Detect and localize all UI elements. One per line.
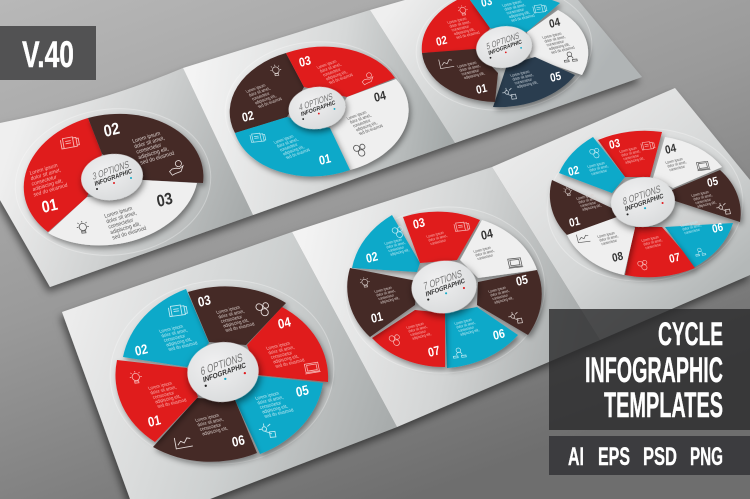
segment 03 red: dolor sit amet, bbox=[318, 62, 342, 74]
segment 06 blue: 06 bbox=[492, 326, 507, 343]
segment 01 brown: consectetur bbox=[460, 67, 481, 76]
segment 02 blue: consectetur bbox=[387, 245, 406, 253]
segment 03 brown: consectetur bbox=[220, 314, 243, 324]
segment 02 red: adipiscing elit, bbox=[452, 26, 476, 36]
segment 06 blue bbox=[665, 220, 733, 268]
segment 05 navy: 05 bbox=[549, 70, 562, 85]
wheel: 6 options bbox=[102, 271, 342, 473]
segment 04 red: adipiscing elit, bbox=[272, 354, 300, 364]
segment 06 blue: Lorem ipsum bbox=[453, 318, 473, 326]
segment 06 brown bbox=[153, 398, 257, 462]
segment 05 brown: 05 bbox=[706, 175, 719, 190]
segment 01 red: sed do eiusmod bbox=[156, 397, 188, 409]
segment 03 red: consectetur bbox=[429, 238, 448, 246]
segment 05 blue: consectetur bbox=[259, 400, 282, 410]
segment 04 white bbox=[527, 10, 588, 75]
segment 05 brown: adipiscing elit, bbox=[696, 200, 717, 209]
segment 05 blue: Lorem ipsum bbox=[254, 391, 280, 401]
wheel: 4 options bbox=[220, 34, 410, 182]
segment 08 white: consectetur bbox=[600, 238, 619, 246]
segment 01 brown: 01 bbox=[475, 82, 488, 97]
segment 02 red: Lorem ipsum bbox=[446, 16, 468, 25]
segment 04 white: dolor sit amet, bbox=[543, 34, 566, 44]
segment 01 red: sed do eiusmod bbox=[33, 182, 68, 199]
segment 02 blue: Lorem ipsum bbox=[586, 161, 606, 169]
center hub: 8 options bbox=[609, 174, 677, 230]
segment 02 brown: 02 bbox=[102, 120, 121, 141]
segment 01 red: 01 bbox=[40, 196, 60, 217]
segment 01 brown: Lorem ipsum bbox=[575, 193, 595, 201]
segment 03 blue: dolor sit amet, bbox=[503, 2, 526, 12]
segment 03 white: dolor sit amet, bbox=[106, 210, 138, 225]
segment 02 brown: sed do eiusmod bbox=[139, 150, 175, 167]
file formats banner: PNG bbox=[690, 443, 723, 471]
center hub: 4 options: INFOGRAPHIC bbox=[301, 100, 336, 118]
segment 05 brown bbox=[477, 270, 542, 335]
center hub: 8 options: 8 OPTIONS bbox=[623, 183, 661, 207]
segment 01 blue: sed do eiusmod bbox=[284, 147, 312, 160]
segment 05 brown: dolor sit amet, bbox=[692, 193, 713, 202]
version badge bbox=[0, 26, 96, 80]
segment 01 red: consectetur bbox=[31, 174, 57, 188]
segment 05 blue: adipiscing elit, bbox=[261, 404, 289, 414]
segment 01 blue: 01 bbox=[318, 151, 333, 168]
segment 08 white: Lorem ipsum bbox=[596, 231, 616, 239]
file formats banner bbox=[549, 436, 750, 475]
segment 04 white: Lorem ipsum bbox=[345, 109, 368, 121]
segment 02 blue: dolor sit amet, bbox=[385, 241, 406, 250]
segment 04 red: Lorem ipsum bbox=[265, 341, 291, 351]
segment 05 navy: consectetur bbox=[513, 76, 534, 85]
segment 02 blue: 02 bbox=[134, 341, 149, 359]
wheel: 3 options bbox=[8, 99, 218, 265]
segment 02 blue bbox=[559, 137, 625, 193]
segment 06 blue: dolor sit amet, bbox=[455, 321, 476, 330]
segment 05 navy bbox=[493, 57, 575, 107]
segment 01 red: adipiscing elit, bbox=[154, 394, 182, 404]
segment 04 white bbox=[460, 220, 537, 278]
segment 04 white: 04 bbox=[480, 226, 495, 243]
segment 01 brown: consectetur bbox=[579, 200, 598, 208]
center hub: 5 options: INFOGRAPHIC bbox=[488, 39, 523, 57]
segment 01 brown: 01 bbox=[370, 309, 385, 326]
segment 05 brown: consectetur bbox=[694, 197, 713, 205]
segment 02 blue: sed do eiusmod bbox=[167, 340, 199, 352]
segment 05 navy: adipiscing elit, bbox=[515, 79, 539, 89]
center hub: 7 options bbox=[409, 257, 479, 317]
center hub: 6 options: 6 OPTIONS bbox=[200, 352, 243, 379]
file formats banner: EPS bbox=[598, 443, 630, 471]
wheel: 8 options bbox=[541, 121, 749, 289]
segment 07 red bbox=[625, 227, 695, 277]
segment 03 brown: sed do eiusmod bbox=[224, 321, 256, 333]
segment 06 blue: Lorem ipsum bbox=[679, 220, 699, 228]
segment 02 brown bbox=[230, 53, 304, 133]
segment 01 red: dolor sit amet, bbox=[30, 167, 61, 182]
segment 07 red: consectetur bbox=[409, 329, 428, 337]
segment 01 blue: dolor sit amet, bbox=[275, 137, 299, 149]
segment 06 blue: consectetur bbox=[457, 325, 476, 333]
center hub: 3 options: 3 OPTIONS bbox=[92, 158, 130, 182]
title banner bbox=[549, 309, 750, 430]
version badge: V.40 bbox=[22, 34, 74, 75]
segment 07 red: 07 bbox=[427, 344, 441, 360]
center hub: 3 options: INFOGRAPHIC bbox=[94, 168, 133, 188]
segment 05 brown: dolor sit amet, bbox=[489, 289, 510, 298]
center hub: 4 options: 4 OPTIONS bbox=[299, 91, 333, 113]
segment 04 white: 04 bbox=[664, 142, 677, 157]
segment 06 brown: consectetur bbox=[199, 422, 222, 432]
segment 02 blue: 02 bbox=[567, 164, 580, 179]
segment 02 blue: adipiscing elit, bbox=[389, 248, 410, 257]
segment 01 brown: adipiscing elit, bbox=[462, 70, 486, 80]
segment 03 brown: 03 bbox=[197, 292, 212, 310]
segment 04 white: adipiscing elit, bbox=[547, 41, 571, 51]
front brochure sheet bbox=[62, 88, 750, 499]
segment 01 blue: adipiscing elit, bbox=[281, 144, 305, 156]
segment 01 brown bbox=[347, 268, 417, 337]
segment 01 brown: Lorem ipsum bbox=[456, 60, 478, 69]
segment 04 white: dolor sit amet, bbox=[666, 160, 687, 169]
segment 02 red: sed do eiusmod bbox=[455, 30, 481, 40]
segment 03 white bbox=[48, 180, 197, 245]
segment 01 red bbox=[24, 118, 102, 232]
segment 08 white: 08 bbox=[611, 250, 624, 265]
segment 02 brown: consectetur bbox=[135, 142, 163, 156]
segment 04 white: Lorem ipsum bbox=[664, 157, 684, 165]
segment 05 blue: sed do eiusmod bbox=[263, 407, 295, 419]
segment 05 brown: 05 bbox=[515, 272, 530, 289]
segment 05 navy: Lorem ipsum bbox=[509, 69, 531, 78]
segment 03 red: consectetur bbox=[321, 67, 342, 77]
center hub: 4 options bbox=[286, 83, 348, 133]
segment 03 red: adipiscing elit, bbox=[624, 156, 645, 165]
segment 03 brown: dolor sit amet, bbox=[217, 309, 245, 319]
segment 01 brown bbox=[422, 49, 498, 102]
segment 03 red: sed do eiusmod bbox=[327, 72, 355, 85]
center hub: 8 options: INFOGRAPHIC bbox=[625, 192, 665, 213]
segment 05 blue: 05 bbox=[295, 382, 310, 400]
segment 05 blue: dolor sit amet, bbox=[256, 395, 284, 405]
segment 04 red: 04 bbox=[277, 314, 292, 332]
segment 04 red: dolor sit amet, bbox=[267, 345, 295, 355]
segment 05 brown bbox=[672, 170, 741, 222]
segment 02 blue: consectetur bbox=[590, 168, 609, 176]
segment 04 white bbox=[330, 79, 409, 170]
segment 04 white: sed do eiusmod bbox=[550, 45, 576, 55]
segment 03 red: 03 bbox=[608, 137, 621, 152]
segment 04 white: 04 bbox=[373, 88, 388, 105]
center hub: 3 options bbox=[78, 150, 146, 204]
segment 04 red: consectetur bbox=[270, 350, 293, 360]
segment 03 red bbox=[598, 131, 662, 177]
segment 05 brown: adipiscing elit, bbox=[493, 296, 514, 305]
segment 02 brown: dolor sit amet, bbox=[247, 86, 271, 98]
segment 04 white: Lorem ipsum bbox=[541, 31, 563, 40]
segment 07 red: dolor sit amet, bbox=[407, 325, 428, 334]
center hub: 6 options bbox=[184, 339, 262, 405]
segment 01 blue: Lorem ipsum bbox=[272, 133, 295, 145]
segment 03 blue bbox=[470, 0, 560, 32]
segment 02 blue: Lorem ipsum bbox=[383, 238, 403, 246]
center hub: 5 options bbox=[473, 23, 535, 71]
segment 03 white: sed do eiusmod bbox=[111, 225, 147, 242]
segment 03 red: 03 bbox=[298, 53, 313, 70]
segment 06 blue: dolor sit amet, bbox=[681, 223, 702, 232]
segment 04 white: 04 bbox=[548, 16, 561, 31]
segment 08 white bbox=[567, 217, 635, 275]
segment 01 red: 01 bbox=[147, 412, 162, 430]
file formats banner: PSD bbox=[643, 443, 677, 471]
segment 07 red: adipiscing elit, bbox=[411, 332, 432, 341]
segment 04 red: sed do eiusmod bbox=[274, 357, 306, 369]
segment 01 red: Lorem ipsum bbox=[147, 381, 173, 391]
segment 06 brown: Lorem ipsum bbox=[194, 413, 220, 423]
segment 01 red: Lorem ipsum bbox=[29, 162, 59, 177]
segment 06 blue: adipiscing elit, bbox=[459, 328, 480, 337]
segment 04 white: consectetur bbox=[668, 164, 687, 172]
segment 01 brown bbox=[550, 180, 617, 235]
segment 02 brown: 02 bbox=[241, 108, 256, 125]
segment 04 white: consectetur bbox=[351, 118, 372, 128]
segment 04 red bbox=[247, 307, 328, 382]
wheel: 7 options bbox=[338, 199, 552, 381]
segment 03 red: dolor sit amet, bbox=[427, 234, 448, 243]
segment 07 red bbox=[372, 310, 445, 367]
segment 02 red: consectetur bbox=[450, 23, 471, 32]
segment 03 brown bbox=[188, 286, 286, 345]
segment 02 blue: consectetur bbox=[163, 333, 186, 343]
segment 02 blue bbox=[352, 215, 420, 272]
segment 04 white bbox=[653, 137, 722, 188]
segment 04 white: dolor sit amet, bbox=[474, 249, 495, 258]
segment 07 red: dolor sit amet, bbox=[642, 238, 663, 247]
segment 05 brown: Lorem ipsum bbox=[487, 286, 507, 294]
segment 01 blue bbox=[235, 117, 350, 176]
segment 03 red bbox=[403, 212, 480, 263]
segment 03 blue: adipiscing elit, bbox=[507, 9, 531, 19]
segment 02 blue bbox=[123, 289, 209, 367]
segment 01 red: adipiscing elit, bbox=[32, 178, 63, 193]
segment 01 red bbox=[115, 360, 198, 442]
segment 01 brown: adipiscing elit, bbox=[379, 296, 400, 305]
segment 03 red: Lorem ipsum bbox=[618, 146, 638, 154]
segment 03 white: 03 bbox=[155, 190, 175, 211]
segment 04 white: Lorem ipsum bbox=[472, 246, 492, 254]
segment 03 red: Lorem ipsum bbox=[425, 231, 445, 239]
segment 03 white: consectetur bbox=[107, 217, 135, 231]
segment 06 blue: 06 bbox=[711, 221, 724, 236]
segment 02 blue: 02 bbox=[365, 249, 380, 266]
segment 02 blue: Lorem ipsum bbox=[158, 324, 184, 334]
segment 01 brown: consectetur bbox=[377, 293, 396, 301]
segment 03 brown: adipiscing elit, bbox=[222, 318, 250, 328]
segment 04 white: adipiscing elit, bbox=[354, 120, 378, 132]
back brochure sheet bbox=[0, 0, 642, 287]
segment 06 brown: dolor sit amet, bbox=[196, 417, 224, 427]
segment 04 white: consectetur bbox=[476, 253, 495, 261]
segment 07 red: Lorem ipsum bbox=[405, 322, 425, 330]
segment 02 red: 02 bbox=[435, 34, 448, 49]
segment 07 red: consectetur bbox=[644, 242, 663, 250]
segment 01 brown: adipiscing elit, bbox=[581, 203, 602, 212]
segment 02 brown: Lorem ipsum bbox=[244, 82, 267, 94]
segment 01 brown: dolor sit amet, bbox=[458, 63, 481, 73]
segment 02 brown: Lorem ipsum bbox=[132, 131, 162, 145]
center hub: 5 options: 5 OPTIONS bbox=[486, 30, 520, 52]
segment 02 brown: sed do eiusmod bbox=[256, 96, 284, 109]
segment 03 red: consectetur bbox=[622, 153, 641, 161]
segment 05 navy: dolor sit amet, bbox=[511, 72, 534, 82]
segment 02 blue: adipiscing elit, bbox=[165, 337, 193, 347]
segment 06 blue bbox=[445, 307, 518, 368]
segment 04 white: sed do eiusmod bbox=[357, 123, 385, 136]
segment 02 red: dolor sit amet, bbox=[448, 19, 471, 29]
segment 05 brown: consectetur bbox=[491, 293, 510, 301]
segment 03 white: Lorem ipsum bbox=[104, 206, 134, 220]
segment 01 red: dolor sit amet, bbox=[149, 385, 177, 395]
segment 05 brown: Lorem ipsum bbox=[690, 190, 710, 198]
segment 03 red: 03 bbox=[412, 215, 427, 232]
segment 02 brown: consectetur bbox=[250, 91, 271, 101]
wheel: 5 options bbox=[411, 0, 597, 117]
segment 03 white: adipiscing elit, bbox=[109, 221, 142, 236]
segment 02 brown: dolor sit amet, bbox=[134, 135, 166, 150]
segment 03 red: adipiscing elit, bbox=[324, 69, 348, 81]
segment 03 brown: Lorem ipsum bbox=[215, 305, 241, 315]
segment 02 blue: dolor sit amet, bbox=[160, 328, 188, 338]
segment 03 red: dolor sit amet, bbox=[620, 149, 641, 158]
segment 04 white: dolor sit amet, bbox=[348, 113, 372, 125]
segment 01 brown: 01 bbox=[568, 215, 581, 230]
segment 03 blue: consectetur bbox=[505, 6, 526, 15]
segment 02 brown: adipiscing elit, bbox=[253, 93, 277, 105]
file formats banner: AI bbox=[568, 443, 584, 471]
segment 01 brown: dolor sit amet, bbox=[577, 196, 598, 205]
segment 01 brown: Lorem ipsum bbox=[373, 286, 393, 294]
segment 01 red: consectetur bbox=[152, 390, 175, 400]
segment 05 blue bbox=[235, 376, 323, 454]
segment 01 brown: dolor sit amet, bbox=[375, 289, 396, 298]
segment 07 red: Lorem ipsum bbox=[640, 235, 660, 243]
segment 02 red bbox=[422, 0, 490, 53]
center hub: 6 options: INFOGRAPHIC bbox=[203, 362, 247, 384]
segment 07 red: 07 bbox=[668, 251, 681, 266]
segment 02 brown: adipiscing elit, bbox=[137, 146, 170, 161]
segment 06 brown: adipiscing elit, bbox=[201, 426, 229, 436]
segment 02 brown bbox=[88, 114, 203, 183]
segment 03 red: Lorem ipsum bbox=[315, 58, 338, 70]
segment 03 red bbox=[286, 47, 395, 97]
segment 06 brown: 06 bbox=[231, 432, 246, 450]
segment 06 blue: consectetur bbox=[683, 227, 702, 235]
center hub: 7 options: 7 OPTIONS bbox=[423, 268, 462, 292]
segment 08 white: dolor sit amet, bbox=[598, 234, 619, 243]
segment 01 blue: consectetur bbox=[278, 142, 299, 152]
segment 03 blue: sed do eiusmod bbox=[510, 13, 536, 23]
segment 02 blue: dolor sit amet, bbox=[588, 164, 609, 173]
center hub: 7 options: INFOGRAPHIC bbox=[425, 277, 466, 299]
segment 04 white: consectetur bbox=[545, 38, 566, 47]
